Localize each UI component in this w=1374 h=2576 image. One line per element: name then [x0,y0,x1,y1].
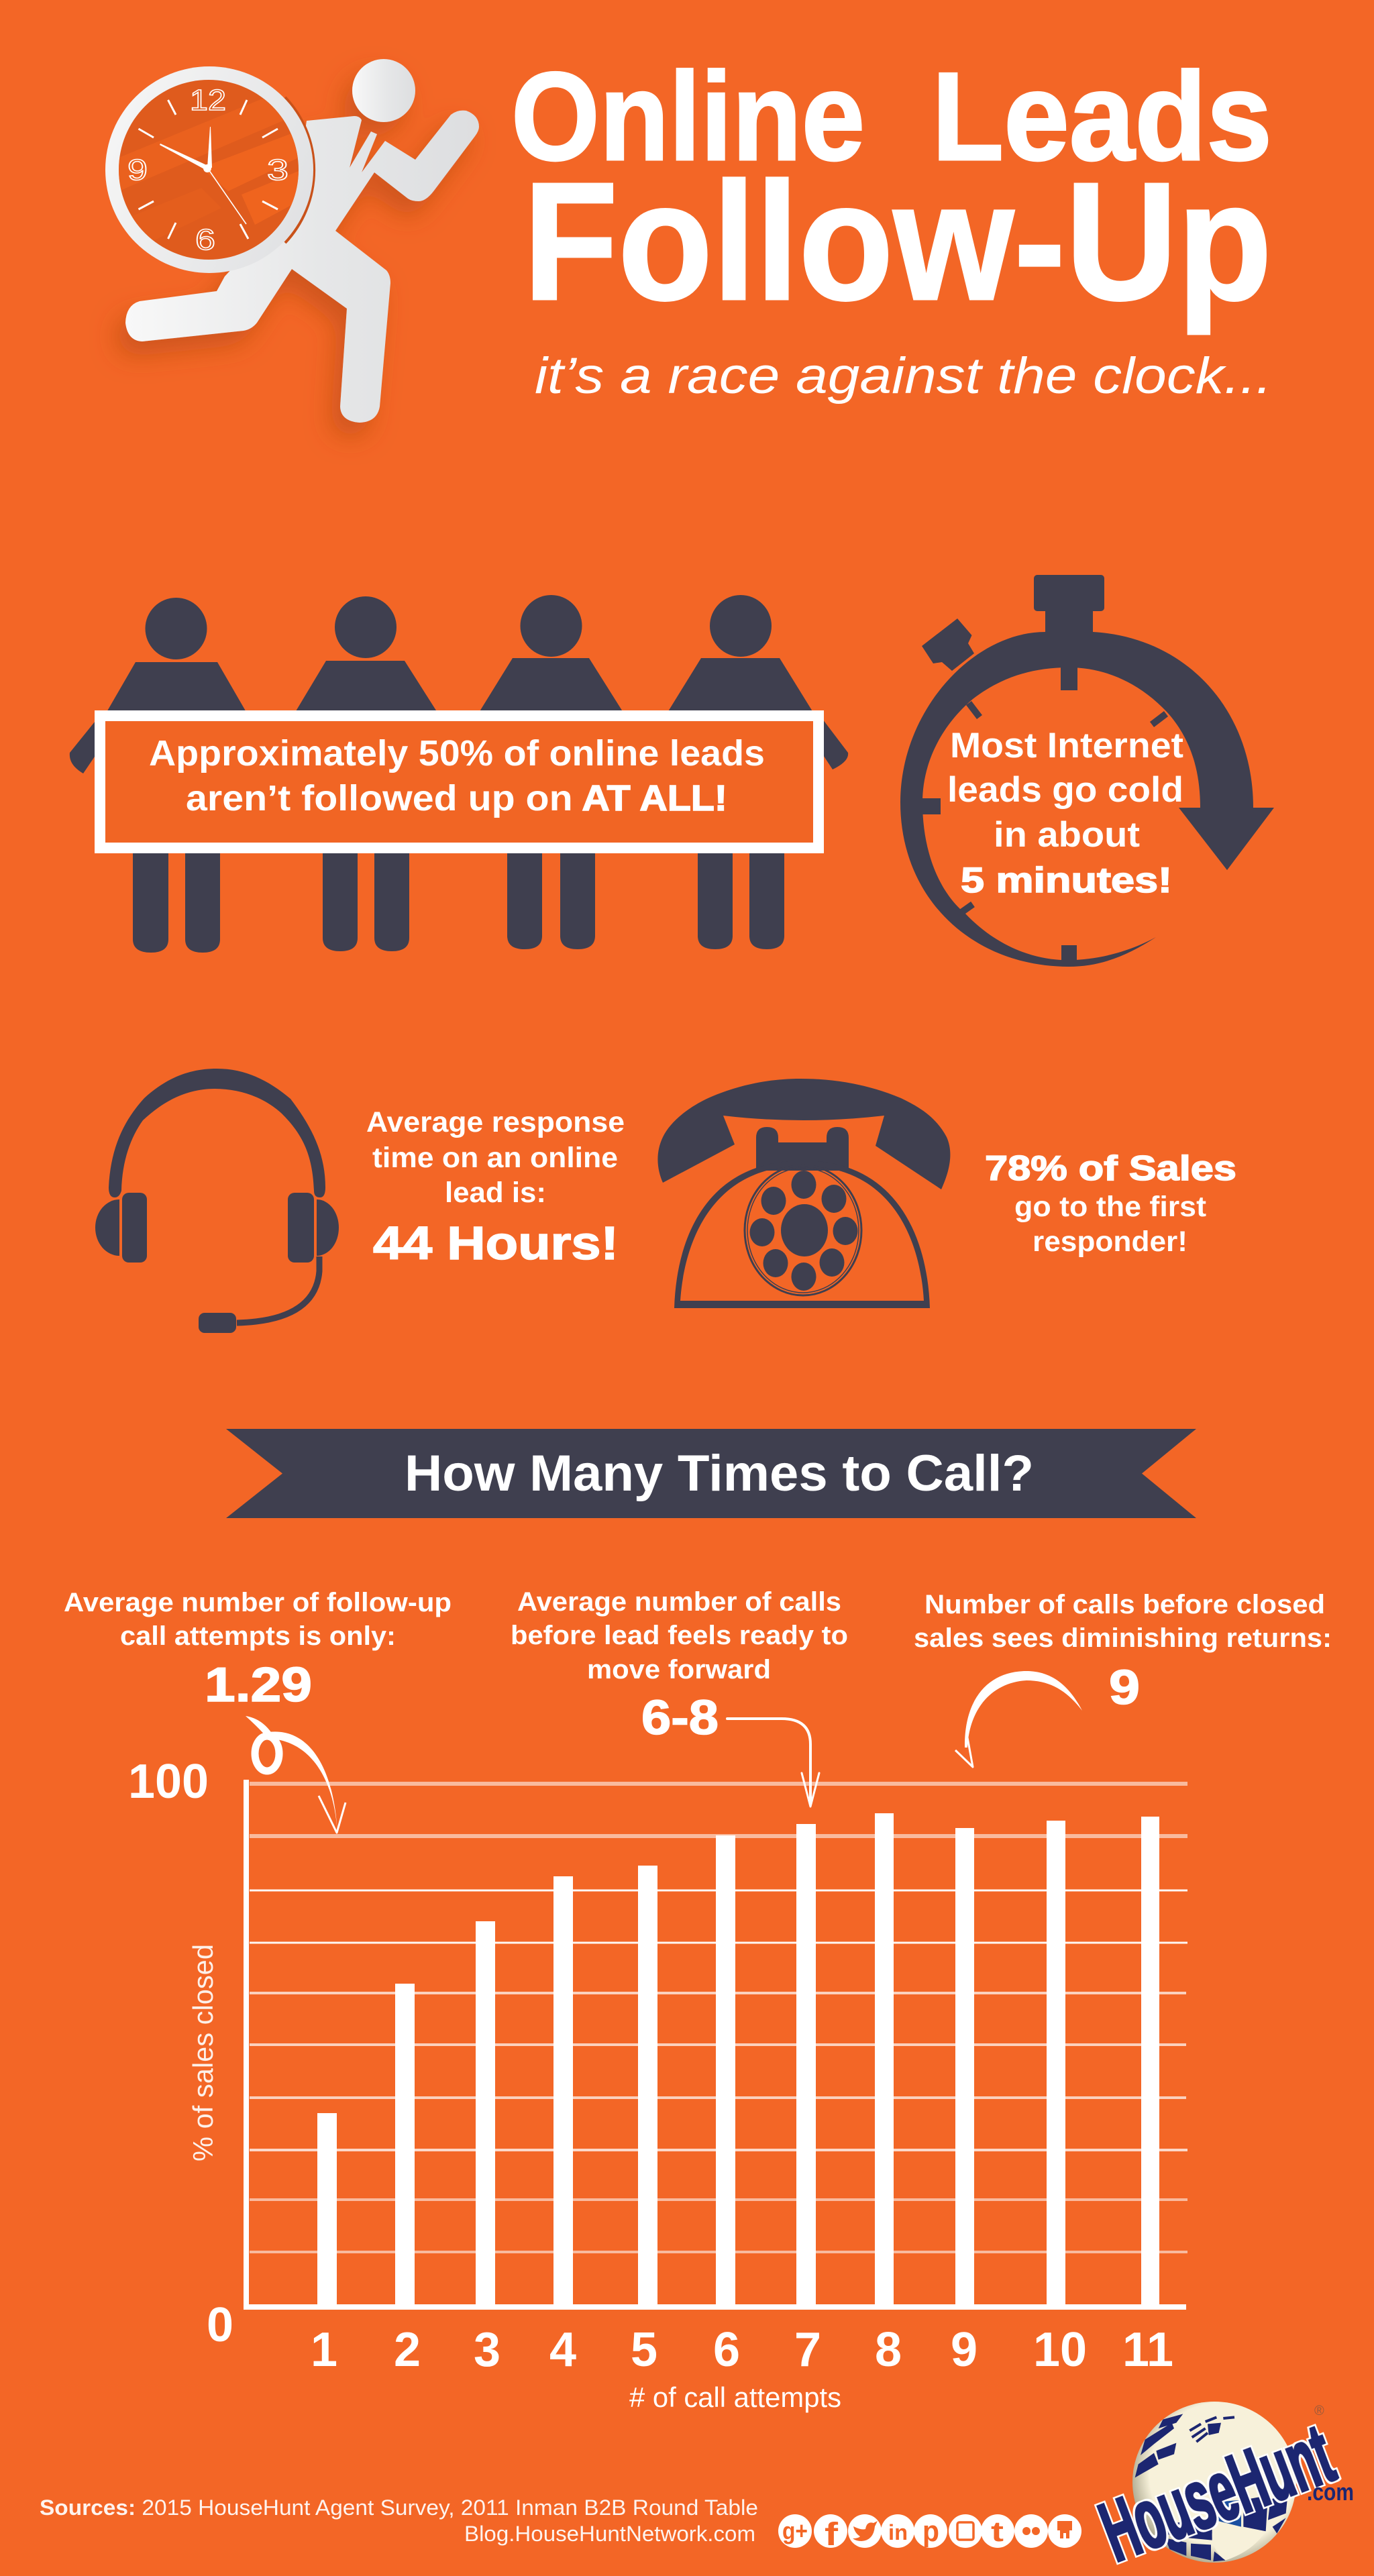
banner: how many times to call: How Many Times to Call? [405,1445,1034,1502]
clock numerals: 6 [195,223,215,256]
arrow: from 6-8 to bar 7 [727,1719,819,1807]
subtitle: it’s a race against the clock... [535,347,1272,405]
phone body [674,1161,930,1308]
x axis title: # of call attempts [629,2381,841,2413]
clock numerals: 9 [127,154,148,186]
callout: average follow-up attempts [64,1588,452,1712]
social media icons: t [991,2516,1004,2547]
callout: average follow-up attempts: call attempts is only: [120,1621,396,1651]
text: 78% of sales: 78% of Sales [985,1149,1236,1188]
callout: diminishing returns: sales sees diminishing returns: [914,1623,1332,1653]
x axis labels: 4 [549,2323,576,2377]
running figure [125,59,479,423]
sources [40,2496,758,2546]
axes [244,1780,249,2310]
x axis labels: 8 [875,2323,902,2377]
callout: calls before lead is ready: move forward [587,1655,771,1684]
text: average response time: time on an online [372,1142,618,1174]
y axis labels: 100 [128,1755,209,1809]
clock numerals: 12 [190,84,226,117]
registered mark: ® [1314,2404,1324,2418]
x axis labels: 10 [1033,2323,1087,2377]
callout: calls before lead is ready: Average number of calls [517,1587,841,1617]
text: 5 minutes [947,726,1183,900]
logo suffix: .com [1307,2478,1354,2506]
text: average response time: Average response [366,1106,625,1138]
callout: calls before lead is ready: before lead feels ready to [511,1621,848,1650]
sign: 50% of leads [100,716,818,848]
icon: rotary telephone [657,1079,950,1308]
arrow: loop from 1.29 [246,1716,346,1833]
callout: diminishing returns: 9 [1109,1661,1140,1715]
bar chart: percent of sales closed by call attempts [128,1755,1187,2413]
y axis labels: % of sales closed [187,1944,219,2161]
logo: HouseHunt globe [1088,2402,1354,2576]
sign: 50% of leads: aren’t followed up on AT ALL! [186,778,727,818]
title: Online [511,46,865,186]
title: Leads [932,46,1272,186]
clock hands [160,127,246,224]
panel: four people holding sign [70,595,848,953]
cradle [756,1127,849,1171]
text: average response time: lead is: [445,1177,546,1209]
social media icons: g+ [782,2517,808,2544]
social media icons [778,2514,1081,2553]
panel: stopwatch [900,575,1274,967]
callout: calls before lead is ready: 6-8 [641,1691,719,1745]
x axis labels: 7 [794,2323,821,2377]
x axis labels: 6 [713,2323,740,2377]
text: 5 minutes: leads go cold [947,770,1183,810]
sources: Blog.HouseHuntNetwork.com [464,2522,755,2546]
callout: diminishing returns [914,1590,1332,1715]
banner: how many times to call [226,1429,1196,1518]
x axis labels: 9 [951,2323,977,2377]
x axis labels: 3 [474,2323,500,2377]
social media icons: in [888,2520,908,2544]
callout: calls before lead is ready [511,1587,848,1745]
dial [745,1165,861,1295]
clock [105,66,314,273]
grid lines [250,1784,1187,2252]
sources: Sources: 2015 HouseHunt Agent Survey, 2011 Inman B2B Round Table [40,2496,758,2520]
title [511,46,1272,335]
text: 78% of sales [985,1149,1236,1258]
y axis labels [128,1755,233,2352]
bars [317,1813,1159,2308]
clock numerals [127,84,288,256]
callout: diminishing returns: Number of calls before closed [924,1590,1325,1619]
text: 5 minutes: 5 minutes! [961,861,1172,900]
x axis labels: 5 [631,2323,657,2377]
person silhouettes [70,595,848,953]
text: average response time: 44 Hours! [373,1217,619,1269]
sign: 50% of leads: Approximately 50% of online leads [149,733,765,773]
title: Follow-Up [523,148,1272,335]
text: 78% of sales: responder! [1033,1226,1187,1258]
callout: average follow-up attempts: Average number of follow-up [64,1588,452,1617]
x axis labels: 1 [311,2323,337,2377]
icon: stopwatch [900,575,1274,967]
globe [1132,2402,1296,2563]
text: average response time [366,1106,625,1269]
handset [657,1079,950,1189]
x axis labels: 2 [394,2323,421,2377]
x axis labels: 11 [1122,2323,1173,2377]
text: 5 minutes: Most Internet [950,726,1183,765]
icon: running figure with clock [105,59,479,423]
text: 78% of sales: go to the first [1014,1191,1206,1223]
y axis labels: 0 [207,2298,233,2352]
callout: average follow-up attempts: 1.29 [205,1658,312,1712]
clock numerals: 3 [267,154,288,186]
social media icons: p [922,2515,939,2548]
icon: headset [95,1069,339,1333]
x axis labels [311,2323,1173,2377]
social media icons: f [825,2517,839,2553]
arrow: from 9 to bar 9 [955,1671,1082,1767]
text: 5 minutes: in about [994,815,1140,855]
